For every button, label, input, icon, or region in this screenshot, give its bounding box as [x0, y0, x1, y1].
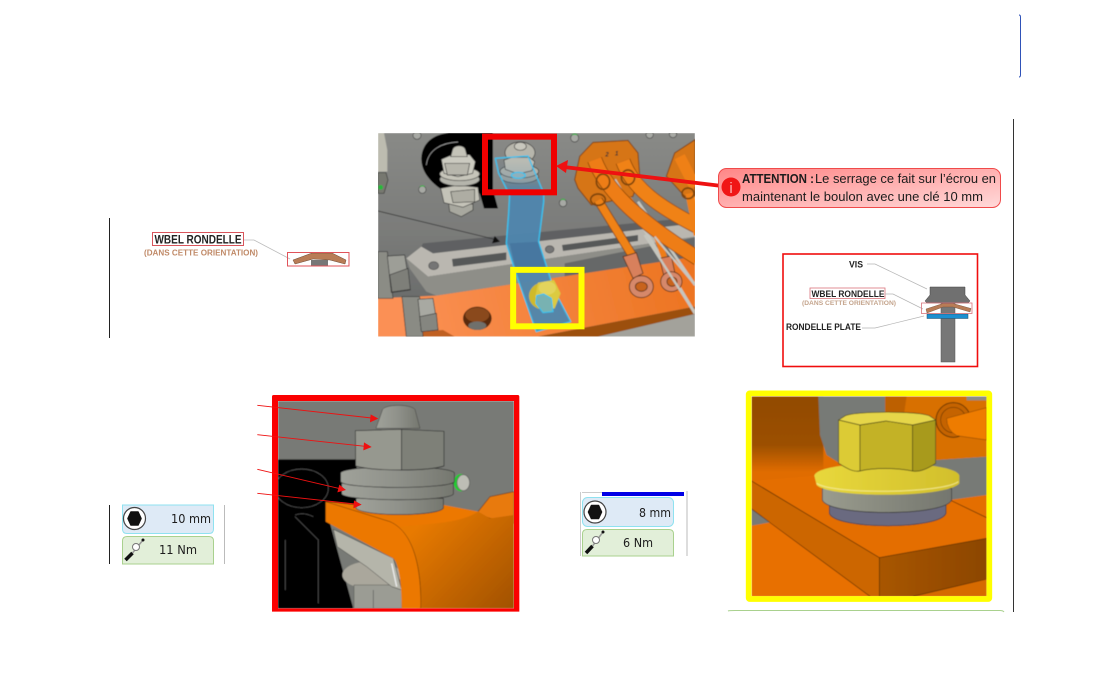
icon: hex socket [124, 508, 146, 530]
top right bolt under strap [500, 142, 539, 183]
orange plate [378, 257, 695, 337]
torque: 11 Nm [159, 542, 197, 557]
panel: tool specs 8 mm / 6 Nm [580, 491, 687, 556]
wall screw dots [413, 130, 677, 207]
icon: info [722, 178, 740, 197]
stacked bolt left [440, 146, 480, 217]
yellow flange [814, 463, 959, 495]
arrow: callout to red box [556, 160, 722, 186]
label: RONDELLE PLATE: RONDELLE PLATE [786, 322, 861, 332]
text: attention message: Le serrage ce fait sur l’écrou en [815, 172, 996, 186]
icon: info: i [729, 180, 733, 197]
icon: rondelle cross-section [288, 252, 349, 266]
blue strap [495, 156, 571, 332]
panel: WBEL rondelle left detail [144, 232, 349, 266]
lower washer and shaft [341, 562, 401, 586]
right orange bracket [477, 492, 514, 523]
panel: tool specs 10 mm / 11 Nm [110, 505, 224, 564]
black recess [421, 133, 498, 208]
back orange fitting [885, 396, 987, 460]
text: attention message [742, 172, 996, 204]
left bolts on rail [378, 252, 438, 337]
cable glands [575, 140, 695, 205]
leader lines [862, 264, 927, 328]
yellow nut [529, 280, 561, 313]
photo: busbar assembly overview [378, 130, 698, 337]
black leader [378, 211, 495, 239]
orange bend [390, 505, 514, 608]
bolt tip [376, 405, 420, 428]
leader line [244, 240, 290, 259]
grey wall [818, 396, 987, 500]
main orange top and edges [952, 494, 986, 538]
frame [749, 393, 989, 599]
upper brown back [752, 396, 823, 486]
text: attention message: maintenant le boulon avec une clé 10 mm [742, 190, 983, 204]
callout arrows [257, 405, 378, 508]
plate hole [463, 307, 492, 330]
callout: attention [718, 168, 1000, 208]
rail shadow [422, 220, 678, 254]
text: attention message: ATTENTION : [742, 172, 814, 186]
ring terminals [623, 253, 682, 298]
panel: bolt section diagram [783, 254, 978, 366]
icon: torque wrench [586, 530, 604, 553]
page frame rules [110, 15, 1020, 612]
left edge column [378, 133, 388, 193]
black recess [278, 459, 357, 608]
small screw [453, 473, 463, 492]
lower washers [828, 504, 947, 527]
icon: torque wrench [126, 538, 144, 560]
hex head [839, 420, 860, 471]
panel: red detail view [257, 395, 519, 612]
rail top face [406, 223, 695, 277]
grey curved piece [333, 529, 402, 590]
photo: busbar assembly overview: 1 [615, 151, 618, 157]
rail front face [406, 237, 695, 296]
gland rings [591, 170, 694, 205]
socket size: 8 mm [639, 505, 671, 520]
panel: yellow detail view [749, 393, 989, 599]
torque: 6 Nm [623, 535, 653, 550]
green panel edge [728, 610, 1004, 612]
hex nut [355, 429, 402, 470]
icon: bolt cross-section [922, 287, 972, 362]
socket size: 10 mm [171, 511, 211, 526]
orange cables [595, 157, 698, 258]
highlight: red box [485, 137, 554, 192]
label: dans cette orientation: (DANS CETTE ORIENTATION) [802, 300, 896, 307]
label: dans cette orientation: (DANS CETTE ORIENTATION) [144, 248, 258, 258]
label: WBEL RONDELLE: WBEL RONDELLE [812, 289, 884, 299]
frame [272, 395, 519, 612]
digits on gland: 2 [604, 153, 609, 159]
bolt stack [356, 498, 443, 515]
grey wires [615, 180, 695, 313]
label: VIS: VIS [849, 260, 863, 270]
icon: hex socket [584, 501, 606, 523]
highlight: yellow box [513, 270, 581, 326]
rail slots [452, 252, 506, 267]
label: WBEL RONDELLE: WBEL RONDELLE [154, 232, 242, 246]
